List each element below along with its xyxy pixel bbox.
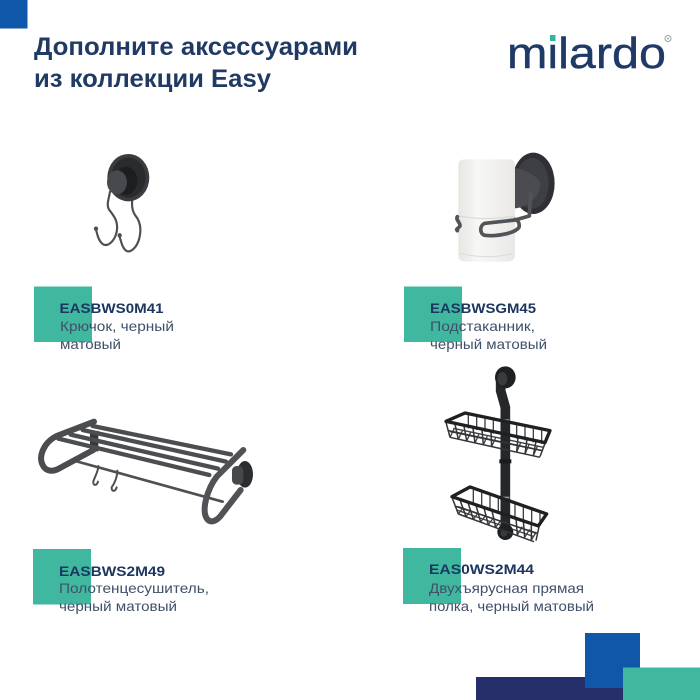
- panel: EASBWS2M49: черный матовый: [59, 598, 177, 614]
- panel: EASBWS0M41: матовый: [60, 336, 121, 352]
- panel: EAS0WS2M44: полка, черный матовый: [429, 598, 594, 614]
- panel: EASBWS0M41: EASBWS0M41: [60, 300, 164, 316]
- panel: EASBWS0M41: [34, 286, 174, 352]
- upper basket front: [446, 422, 545, 457]
- icon: towel rack: [41, 422, 253, 521]
- panel: EASBWSGM45: черный матовый: [430, 336, 547, 352]
- lower basket back: [457, 490, 540, 540]
- logo: milardo: milardo: [507, 29, 666, 78]
- wall strap: [501, 377, 505, 535]
- lower basket front: [452, 497, 539, 542]
- panel: EASBWSGM45: Подстаканник,: [430, 318, 535, 334]
- panel: EAS0WS2M44: Двухъярусная прямая: [429, 580, 584, 596]
- panel: EAS0WS2M44: [403, 548, 594, 614]
- panel: EASBWS0M41: Крючок, черный: [60, 318, 174, 334]
- corner blocks: [476, 633, 700, 700]
- panel: EASBWS2M49: Полотенцесушитель,: [59, 580, 209, 596]
- icon: glass holder: [457, 153, 555, 262]
- panel: EAS0WS2M44: EAS0WS2M44: [429, 561, 534, 577]
- icon: two-tier shelf: [446, 366, 550, 542]
- corner square: [0, 0, 28, 28]
- upper basket back: [450, 415, 543, 456]
- panel: EASBWSGM45: EASBWSGM45: [430, 300, 536, 316]
- icon: double hook: [94, 154, 149, 251]
- panel: EASBWSGM45: [404, 286, 547, 352]
- panel: EASBWS2M49: [33, 549, 209, 614]
- title: Дополните аксессуарами: [34, 33, 358, 61]
- title: из коллекции Easy: [34, 65, 271, 93]
- title: [34, 33, 358, 93]
- panel: EASBWS2M49: EASBWS2M49: [59, 563, 165, 579]
